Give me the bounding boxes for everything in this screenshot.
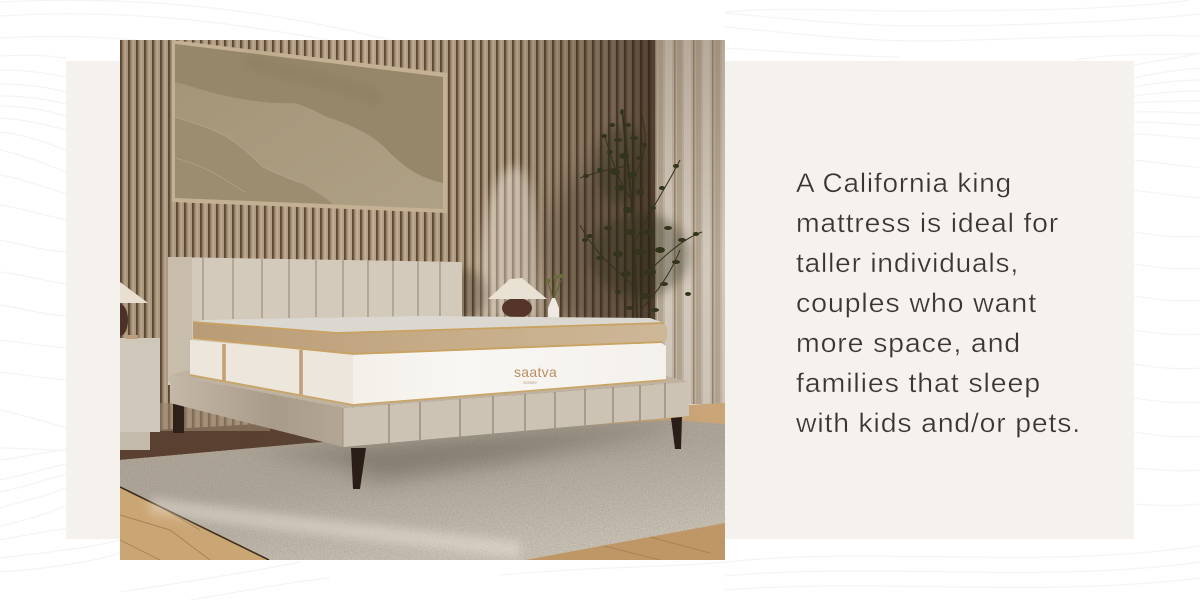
body text: who a California king suits: with kids and/or pets. [795,408,1081,438]
frame top surface [170,370,689,408]
bed [160,257,689,489]
floor [120,403,725,560]
photo: bedroom with California king mattress [112,40,725,560]
mattress side [190,340,353,405]
rug [120,420,725,560]
body text: who a California king suits: taller individuals, [796,248,1019,278]
body text: who a California king suits [795,168,1081,438]
body text: who a California king suits: couples who want [796,288,1037,318]
lower gold piping [190,375,666,405]
plant [580,109,702,322]
body text: who a California king suits: mattress is ideal for [796,208,1059,238]
upper gold piping [193,322,664,354]
nightstand with lamp (left) [120,282,160,450]
frame side [170,375,343,447]
brand logo: saatva [514,364,557,380]
brand sub-label: Solaire [523,380,538,385]
pillow top surface [195,316,664,333]
under-bed slats and rear leg [160,403,270,433]
curtain [655,40,725,404]
wall: wood slats [120,40,665,440]
right leg [671,417,682,449]
wall art: framed wave relief [172,40,447,213]
panel: beige backing card [66,61,1134,539]
body text: who a California king suits: families that sleep [796,368,1041,398]
body text: who a California king suits: A California king [796,168,1012,198]
headboard [168,257,462,385]
front leg [351,448,366,489]
mattress side bands [224,344,301,396]
mattress front panel [353,342,666,405]
lamp and vase on right nightstand [488,274,563,318]
body text: who a California king suits: more space, and [796,328,1021,358]
frame front with channels [343,382,689,447]
pillow top side [193,322,667,354]
